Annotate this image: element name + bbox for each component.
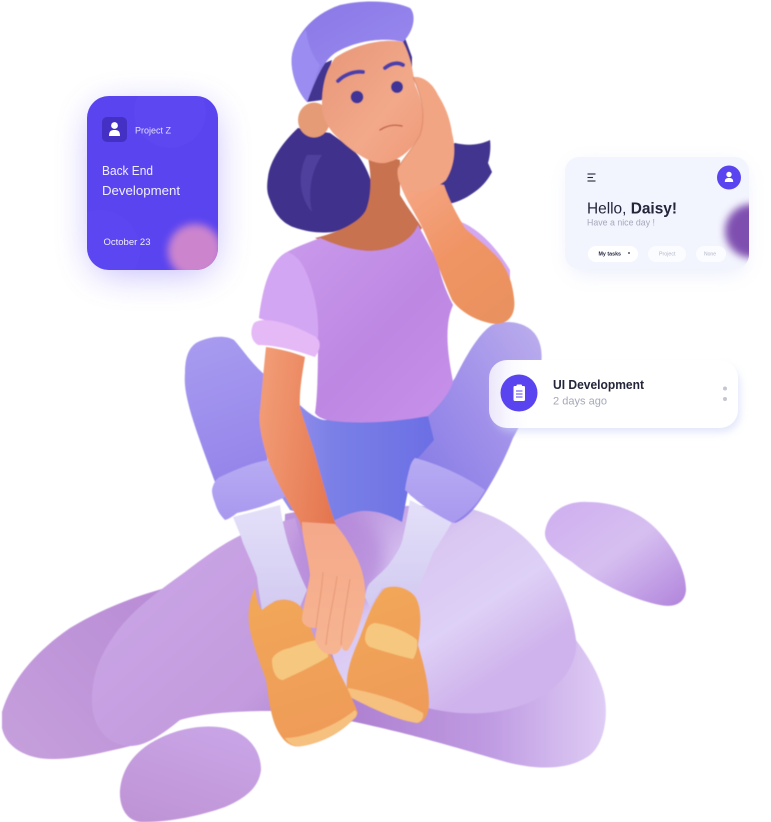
rock: back right lobe: [345, 640, 606, 768]
shoe strap: right: [365, 623, 417, 659]
arm: left: [259, 347, 345, 560]
rock: middle lobe: [92, 518, 345, 746]
eye: right: [391, 81, 403, 93]
card background: [565, 157, 749, 269]
card background: [489, 360, 738, 428]
card background: [87, 96, 218, 270]
rock: small top right: [545, 502, 686, 606]
hand: on shoe: [302, 522, 365, 655]
heading: Back End Development: Development: [102, 184, 181, 198]
icon: user avatar: [717, 166, 741, 190]
card: UI Development: [489, 360, 740, 432]
rock: shadow under legs: [292, 508, 384, 612]
sock: right: [365, 500, 452, 607]
cuff: right pant: [405, 458, 485, 523]
hair under cap: [307, 38, 412, 102]
shoe: right: [347, 586, 429, 723]
timestamp: 2 days ago: [553, 396, 607, 408]
icon: menu: [588, 174, 596, 181]
shoe strap: left: [272, 640, 328, 680]
greeting: Hello, Daisy!: [587, 200, 677, 218]
icon: clipboard: [500, 374, 538, 412]
label: Project Z: Project Z: [135, 126, 171, 136]
mouth: [380, 125, 402, 130]
face: [322, 41, 423, 163]
subtitle: Have a nice day !: [587, 218, 655, 228]
ear: [298, 102, 330, 138]
cap: [292, 1, 414, 102]
shoe sole: left: [285, 710, 357, 746]
card: Hello Daisy: [565, 157, 771, 273]
shirt: left sleeve: [259, 252, 318, 338]
shirt sleeve cuff: [251, 320, 320, 357]
heading: Back End Development: Back End: [102, 164, 153, 178]
shirt: right sleeve behind arm: [440, 220, 510, 315]
hand crease: [398, 77, 423, 168]
card shadow: [570, 165, 745, 273]
forearm: raised: [398, 178, 514, 324]
hair: left side: [267, 128, 373, 232]
shoe: left: [249, 588, 358, 746]
tab: My tasks: [588, 246, 638, 262]
sock: left: [233, 505, 307, 610]
hair: right side: [397, 140, 492, 205]
leg: right: [410, 322, 542, 523]
eyebrow: right: [385, 63, 403, 68]
neck: [315, 150, 422, 252]
eyebrow: left: [338, 72, 363, 81]
finger lines: [316, 572, 350, 645]
white gap under hair: [400, 203, 424, 221]
tab: Project: Project: [659, 252, 676, 258]
heading: Back End Development: [102, 164, 181, 198]
date: October 23: [104, 237, 150, 248]
card shadow: [92, 108, 214, 273]
pants: center: [264, 405, 434, 522]
pink blob: [168, 224, 222, 278]
shirt: [259, 225, 453, 423]
hair: highlight: [301, 155, 322, 212]
cuff: left pant: [212, 460, 285, 520]
shoe sole: right: [347, 688, 423, 723]
icon: user avatar box: [102, 117, 127, 142]
card: Project Z: [60, 76, 222, 290]
hand: on cheek: [398, 77, 454, 192]
rock: back left lobe: [2, 588, 165, 759]
tab: None: [696, 246, 726, 262]
eye: left: [351, 91, 363, 103]
tab: Project: [648, 246, 686, 262]
title: UI Development: [553, 378, 645, 392]
tab: My tasks: My tasks: [598, 252, 621, 258]
purple blob: [719, 198, 749, 264]
rock: small bottom left: [120, 726, 261, 822]
rock: main body: [280, 506, 576, 713]
person: [185, 1, 542, 746]
tab: None: None: [704, 252, 716, 258]
rock: seat with lobes: [2, 506, 606, 768]
leg: left: [185, 337, 268, 482]
cap: side panel: [292, 30, 320, 102]
icon: more dots: [723, 386, 727, 401]
card shadow: [494, 366, 740, 432]
